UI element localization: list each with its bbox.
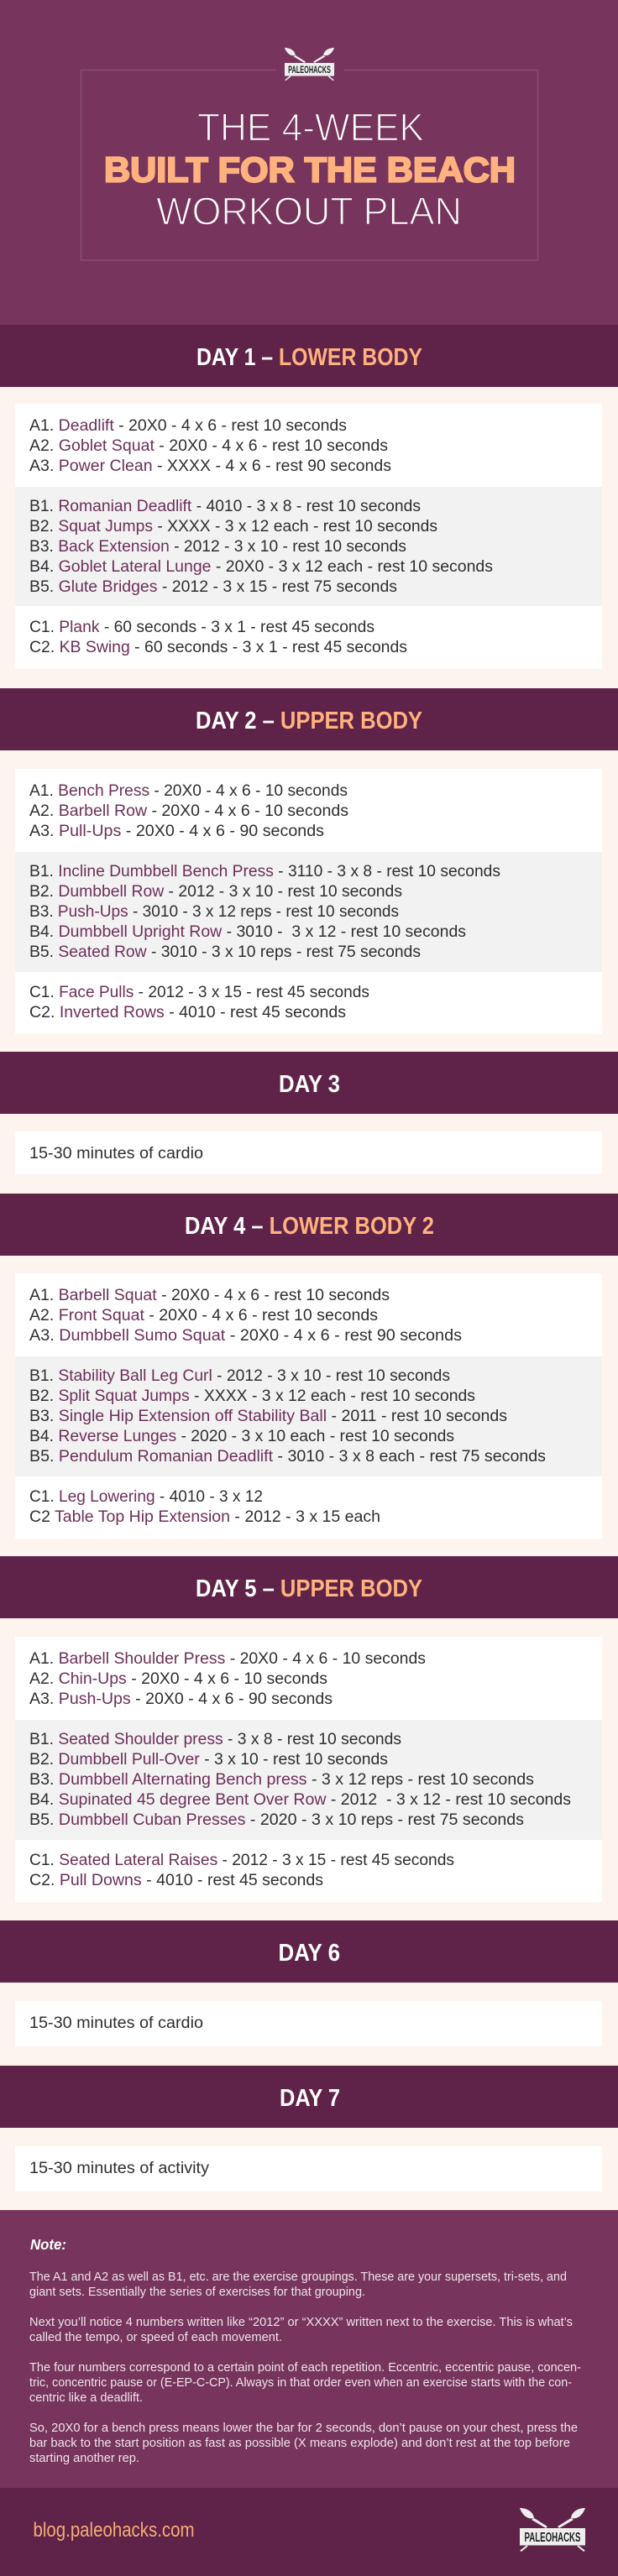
panel: day 4 exercises: C2 Table Top Hip Extension - 2012 - 3 x 15 each bbox=[29, 1508, 380, 1526]
panel: day 2 exercises: A2. Barbell Row - 20X0 - 4 x 6 - 10 seconds bbox=[29, 802, 348, 820]
panel: day 2 exercises: B4. Dumbbell Upright Row - 3010 - 3 x 12 - rest 10 seconds bbox=[29, 923, 466, 941]
heading: day 7 bbox=[0, 2066, 618, 2128]
panel: day 5 exercises: C2. Pull Downs - 4010 - rest 45 seconds bbox=[29, 1872, 323, 1889]
heading: day 1 bbox=[0, 325, 618, 387]
panel: day 4 exercises: A3. Dumbbell Sumo Squat - 20X0 - 4 x 6 - rest 90 seconds bbox=[29, 1327, 462, 1345]
panel: note: So, 20X0 for a bench press means lower the bar for 2 seconds, don’t pause on your chest, press the bbox=[29, 2421, 578, 2435]
panel: day 1 exercises: B3. Back Extension - 2012 - 3 x 10 - rest 10 seconds bbox=[29, 538, 406, 556]
panel: day 6 cardio: 15-30 minutes of cardio bbox=[29, 2014, 203, 2032]
panel: day 5 exercises: B1. Seated Shoulder press - 3 x 8 - rest 10 seconds bbox=[29, 1731, 401, 1748]
heading: day 4: DAY 4 – LOWER BODY 2 bbox=[185, 1213, 434, 1240]
panel: day 5 exercises: B3. Dumbbell Alternating Bench press - 3 x 12 reps - rest 10 seconds bbox=[29, 1771, 534, 1789]
panel: day 5 exercises: B2. Dumbbell Pull-Over - 3 x 10 - rest 10 seconds bbox=[29, 1751, 388, 1769]
panel: day 4 exercises: B3. Single Hip Extension off Stability Ball - 2011 - rest 10 seconds bbox=[29, 1408, 507, 1425]
panel: day 5 exercises: A1. Barbell Shoulder Press - 20X0 - 4 x 6 - 10 seconds bbox=[29, 1650, 426, 1668]
panel: day 1 exercises: A3. Power Clean - XXXX - 4 x 6 - rest 90 seconds bbox=[29, 457, 391, 475]
panel: day 5 exercises: B5. Dumbbell Cuban Presses - 2020 - 3 x 10 reps - rest 75 seconds bbox=[29, 1811, 524, 1829]
panel: note: The four numbers correspond to a certain point of each repetition. Eccentric, eccentric pause, concen- bbox=[29, 2360, 581, 2375]
panel: day 1 exercises: B5. Glute Bridges - 2012 - 3 x 15 - rest 75 seconds bbox=[29, 578, 397, 596]
title: WORKOUT PLAN bbox=[156, 190, 462, 233]
panel: day 1 exercises bbox=[15, 404, 602, 669]
panel: day 4 exercises: C1. Leg Lowering - 4010 - 3 x 12 bbox=[29, 1488, 263, 1506]
panel: day 1 exercises: A2. Goblet Squat - 20X0 - 4 x 6 - rest 10 seconds bbox=[29, 437, 388, 455]
heading: day 4 bbox=[0, 1194, 618, 1256]
panel: day 2 exercises: C1. Face Pulls - 2012 - 3 x 15 - rest 45 seconds bbox=[29, 984, 369, 1001]
heading: day 2 bbox=[0, 688, 618, 750]
panel: day 4 exercises: A1. Barbell Squat - 20X0 - 4 x 6 - rest 10 seconds bbox=[29, 1287, 390, 1304]
panel: day 5 exercises: C1. Seated Lateral Raises - 2012 - 3 x 15 - rest 45 seconds bbox=[29, 1852, 454, 1869]
heading: day 5 bbox=[0, 1556, 618, 1618]
panel: day 1 exercises: B2. Squat Jumps - XXXX - 3 x 12 each - rest 10 seconds bbox=[29, 518, 437, 536]
title bbox=[104, 106, 516, 233]
panel: day 5 exercises: A2. Chin-Ups - 20X0 - 4 x 6 - 10 seconds bbox=[29, 1670, 327, 1688]
panel: day 5 exercises: A3. Push-Ups - 20X0 - 4 x 6 - 90 seconds bbox=[29, 1690, 333, 1708]
panel: note: called the tempo, or speed of each movement. bbox=[29, 2330, 282, 2344]
panel: day 3 cardio bbox=[15, 1131, 602, 1174]
heading: day 3: DAY 3 bbox=[279, 1071, 340, 1098]
footer bbox=[0, 2488, 618, 2576]
panel: day 5 exercises bbox=[15, 1637, 602, 1902]
panel: day 4 exercises: A2. Front Squat - 20X0 - 4 x 6 - rest 10 seconds bbox=[29, 1307, 378, 1325]
panel: day 2 exercises bbox=[15, 769, 602, 1034]
panel: day 7 activity bbox=[15, 2146, 602, 2192]
panel: note: Note: bbox=[30, 2236, 66, 2253]
panel: note: The A1 and A2 as well as B1, etc. are the exercise groupings. These are your supersets, tri-sets, and bbox=[29, 2270, 567, 2284]
panel: day 6 cardio bbox=[15, 2001, 602, 2046]
icon: paleohacks footer logo bbox=[520, 2508, 585, 2551]
panel: day 2 exercises: B5. Seated Row - 3010 - 3 x 10 reps - rest 75 seconds bbox=[29, 943, 421, 961]
panel: note: Next you’ll notice 4 numbers written like “2012” or “XXXX” written next to the exercise. This is what’s bbox=[29, 2315, 573, 2329]
heading: day 6 bbox=[0, 1920, 618, 1983]
title: THE 4-WEEK bbox=[197, 106, 424, 149]
panel: day 1 exercises: A1. Deadlift - 20X0 - 4 x 6 - rest 10 seconds bbox=[29, 417, 347, 435]
panel: day 4 exercises: B2. Split Squat Jumps - XXXX - 3 x 12 each - rest 10 seconds bbox=[29, 1387, 475, 1405]
panel: note bbox=[0, 2210, 618, 2488]
icon: paleohacks logo bbox=[285, 48, 334, 81]
footer: blog.paleohacks.com bbox=[34, 2519, 195, 2542]
panel: day 2 exercises: B1. Incline Dumbbell Bench Press - 3110 - 3 x 8 - rest 10 seconds bbox=[29, 863, 500, 880]
heading: day 3 bbox=[0, 1052, 618, 1114]
title: BUILT FOR THE BEACH bbox=[104, 149, 516, 190]
panel: day 1 exercises: B4. Goblet Lateral Lunge - 20X0 - 3 x 12 each - rest 10 seconds bbox=[29, 558, 493, 576]
panel: day 4 exercises: B5. Pendulum Romanian Deadlift - 3010 - 3 x 8 each - rest 75 seconds bbox=[29, 1448, 546, 1466]
panel: day 7 activity: 15-30 minutes of activity bbox=[29, 2160, 210, 2177]
panel: day 4 exercises: B4. Reverse Lunges - 2020 - 3 x 10 each - rest 10 seconds bbox=[29, 1428, 454, 1445]
icon: paleohacks footer logo: PALEOHACKS bbox=[524, 2531, 581, 2545]
panel: day 2 exercises: B2. Dumbbell Row - 2012 - 3 x 10 - rest 10 seconds bbox=[29, 883, 402, 901]
panel: day 4 exercises bbox=[15, 1273, 602, 1539]
panel: day 4 exercises: B1. Stability Ball Leg Curl - 2012 - 3 x 10 - rest 10 seconds bbox=[29, 1367, 450, 1385]
panel: day 1 exercises: C1. Plank - 60 seconds - 3 x 1 - rest 45 seconds bbox=[29, 619, 374, 636]
panel: day 2 exercises: B3. Push-Ups - 3010 - 3 x 12 reps - rest 10 seconds bbox=[29, 903, 399, 921]
panel: note: starting another rep. bbox=[29, 2451, 139, 2465]
panel: day 3 cardio: 15-30 minutes of cardio bbox=[29, 1145, 203, 1163]
panel: note: centric like a deadlift. bbox=[29, 2391, 143, 2405]
panel: note: bar back to the start position as fast as possible (X means explode) and don’t rest at the top before bbox=[29, 2436, 570, 2450]
panel: note: giant sets. Essentially the series of exercises for that grouping. bbox=[29, 2285, 365, 2299]
panel: day 1 exercises: C2. KB Swing - 60 seconds - 3 x 1 - rest 45 seconds bbox=[29, 639, 407, 656]
heading: day 6: DAY 6 bbox=[279, 1940, 340, 1967]
heading: day 7: DAY 7 bbox=[280, 2085, 340, 2112]
panel: day 2 exercises: A1. Bench Press - 20X0 - 4 x 6 - 10 seconds bbox=[29, 782, 348, 800]
heading: day 1: DAY 1 – LOWER BODY bbox=[196, 344, 422, 371]
panel: day 2 exercises: A3. Pull-Ups - 20X0 - 4 x 6 - 90 seconds bbox=[29, 823, 324, 840]
heading: day 5: DAY 5 – UPPER BODY bbox=[196, 1575, 422, 1602]
header panel bbox=[0, 0, 618, 325]
panel: note: tric, concentric pause or (E-EP-C-CP). Always in that order even when an exercise starts with the con- bbox=[29, 2375, 572, 2390]
panel: day 5 exercises: B4. Supinated 45 degree Bent Over Row - 2012 - 3 x 12 - rest 10 seconds bbox=[29, 1791, 571, 1809]
heading: day 2: DAY 2 – UPPER BODY bbox=[196, 708, 422, 734]
panel: day 2 exercises: C2. Inverted Rows - 4010 - rest 45 seconds bbox=[29, 1004, 346, 1022]
icon: paleohacks logo: PALEOHACKS bbox=[288, 64, 331, 76]
panel: day 1 exercises: B1. Romanian Deadlift - 4010 - 3 x 8 - rest 10 seconds bbox=[29, 498, 421, 515]
